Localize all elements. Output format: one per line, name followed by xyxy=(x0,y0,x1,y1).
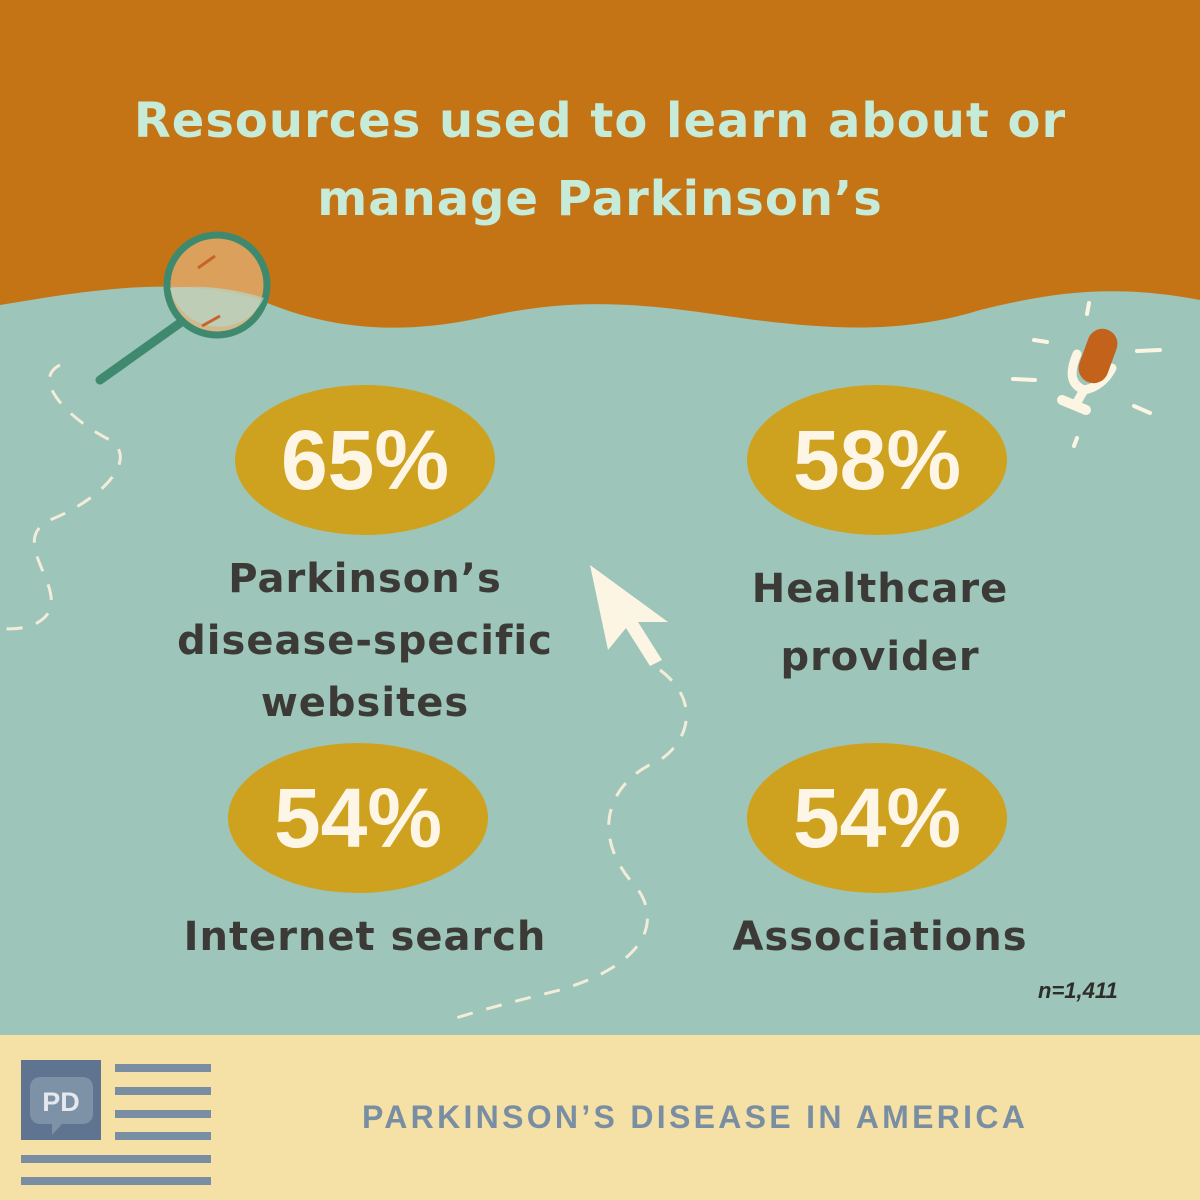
stat: 65%: 65% xyxy=(281,412,449,506)
stat: 54% internet xyxy=(228,743,488,893)
label: healthcare provider: provider xyxy=(780,634,980,680)
label: healthcare provider: Healthcare xyxy=(752,566,1008,612)
stat: 58% xyxy=(747,385,1007,535)
label: websites: websites xyxy=(261,680,469,726)
stat: 58%: 58% xyxy=(793,412,961,506)
label: associations: Associations xyxy=(732,914,1028,960)
logo: PD: PD xyxy=(42,1087,80,1117)
label: internet search: Internet search xyxy=(184,914,546,960)
title: manage Parkinson’s xyxy=(317,171,883,227)
icon: cursor arrow xyxy=(590,565,668,666)
note: sample size: n=1,411 xyxy=(1038,978,1118,1003)
title: Resources used to learn about or xyxy=(134,93,1066,149)
label: websites: disease-specific xyxy=(177,618,553,664)
label: healthcare provider xyxy=(752,566,1008,680)
stat: 54% associations: 54% xyxy=(793,770,961,864)
footer text: PARKINSON’S DISEASE IN AMERICA xyxy=(362,1099,1028,1135)
stat: 65% xyxy=(235,385,495,535)
label: websites xyxy=(177,556,553,726)
stat: 54% associations xyxy=(747,743,1007,893)
footer xyxy=(0,1035,1200,1200)
logo: PD xyxy=(21,1060,211,1185)
label: websites: Parkinson’s xyxy=(228,556,502,602)
icon: microphone xyxy=(1011,301,1162,448)
icon: magnifying glass xyxy=(96,232,270,384)
title xyxy=(134,93,1066,227)
stat: 54% internet: 54% xyxy=(274,770,442,864)
